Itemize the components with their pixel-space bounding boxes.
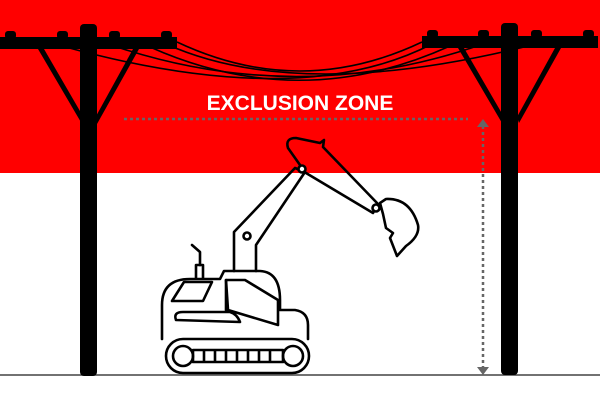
body: [162, 271, 308, 339]
power lines: [62, 42, 536, 80]
icon: excavator: [162, 138, 418, 373]
arm: [287, 138, 378, 213]
left utility pole: [0, 24, 177, 376]
ground line: [0, 374, 600, 376]
boom: [234, 168, 305, 271]
dotted height line with arrow: [124, 119, 489, 375]
red danger zone background: [0, 0, 600, 173]
right utility pole: [422, 23, 598, 375]
title: exclusion zone: EXCLUSION ZONE: [207, 92, 393, 115]
exhaust: [196, 265, 203, 278]
tracks: [166, 339, 309, 373]
bucket: [380, 199, 418, 256]
